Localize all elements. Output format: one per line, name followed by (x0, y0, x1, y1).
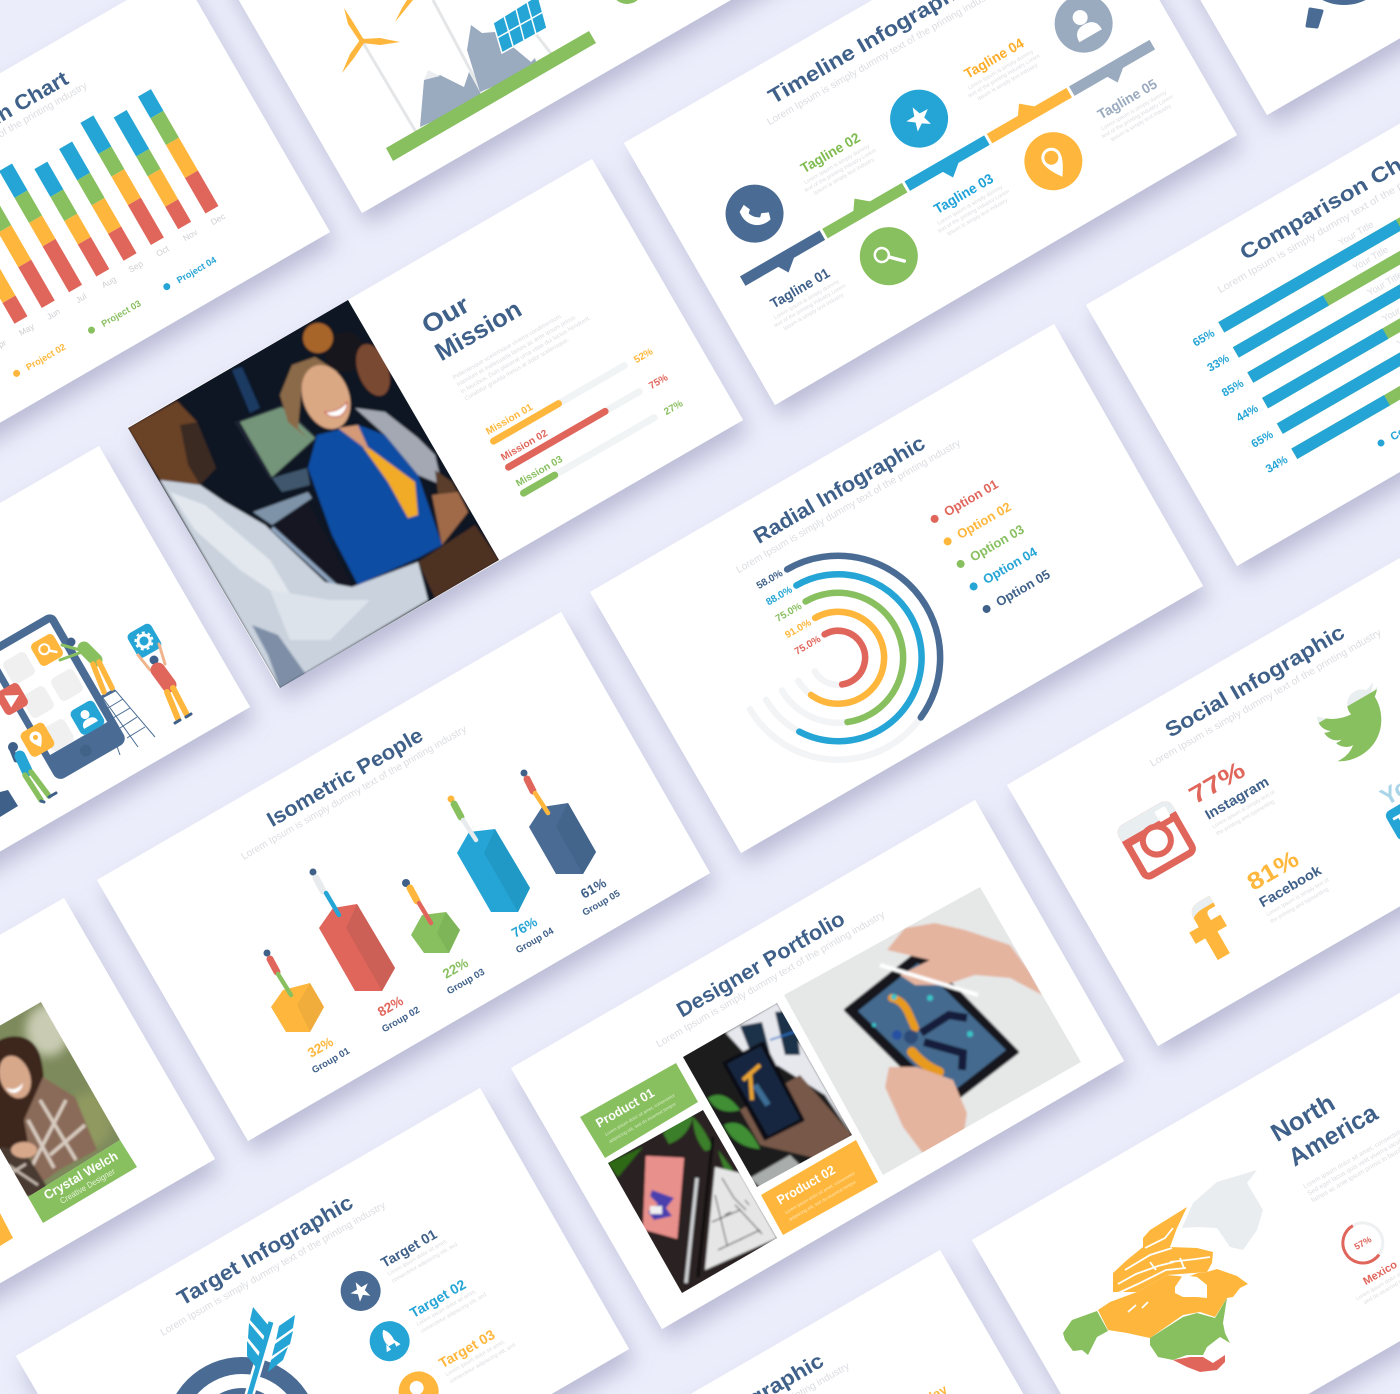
name band: Creative Designer (58, 1166, 117, 1206)
icon: instagram (1114, 798, 1199, 883)
percent labels: 65% (1250, 429, 1276, 451)
month axis labels: Sep (127, 258, 145, 275)
radial chart (699, 518, 977, 797)
stacked bars (0, 84, 218, 339)
month axis labels: Jul (74, 291, 88, 305)
navy base block (0, 790, 18, 817)
card: product 01: Product 01 (593, 1085, 657, 1131)
icon: app pin (19, 721, 56, 759)
solar panel (493, 0, 547, 53)
mission body text: in faucibus. Duis placerat urna vitae dui luctus hendrerit. (460, 315, 592, 395)
tagline blocks: text of the printing industry Lorem (773, 283, 847, 329)
social title: Social Infographic (1161, 621, 1349, 742)
tagline blocks: Ipsum is simply text industry (946, 198, 1009, 238)
mission body text: Pellentesque scelerisque viverra condimentum. (452, 313, 564, 381)
radial percent labels: 75.0% (774, 601, 804, 625)
icon: youtube (1371, 760, 1400, 842)
figure: group 03 person (402, 879, 431, 923)
tagline blocks: Ipsum is simply text industry (1110, 103, 1173, 143)
block: group 01 (271, 983, 324, 1032)
icon: star (879, 79, 959, 158)
radial legend: Option 04 (980, 544, 1040, 587)
radial legend: Option 05 (993, 566, 1053, 609)
percent labels: 85% (1220, 378, 1246, 400)
photo: crystal welch portrait (0, 1002, 120, 1197)
radial title: Radial Infographic (750, 431, 930, 549)
label: group 04 (505, 909, 556, 956)
label: group 03: Group 03 (445, 967, 487, 997)
label: group 02: Group 02 (380, 1005, 422, 1035)
month axis labels: Jun (45, 306, 62, 322)
target title: Target Infographic (173, 1191, 357, 1310)
donut: mexico 57%: 57% (1353, 1234, 1373, 1252)
mission title (415, 269, 527, 367)
stat: instagram: Instagram (1202, 773, 1271, 823)
tagline blocks: Lorem Ipsum is simply dummy (1100, 90, 1168, 132)
percent labels: 44% (1235, 403, 1261, 425)
radial legend: Option 02 (954, 499, 1014, 542)
stat: instagram: 77% (1185, 756, 1250, 810)
stat: instagram (1185, 749, 1281, 839)
radial percent labels: 91.0% (783, 617, 814, 641)
panel: crystal welch profile slide (0, 922, 214, 1283)
photo: business meeting (120, 290, 510, 700)
tagline blocks: Tagline 05 (1095, 75, 1160, 122)
map: greenland (1182, 1170, 1263, 1250)
label: group 05 (571, 871, 623, 919)
item: target 03: Target 03 (436, 1326, 498, 1371)
label: group 03: 22% (440, 955, 471, 982)
stat: facebook: 81% (1243, 846, 1304, 896)
block: group 04 (457, 829, 530, 912)
panel: radial infographic slide (590, 324, 1203, 853)
panel: north america slide (972, 972, 1400, 1394)
tagline blocks: Tagline 04 (961, 35, 1027, 82)
map: united states (1150, 1298, 1230, 1360)
tablet device (0, 611, 128, 782)
legend: Project 04 (175, 254, 219, 285)
app grid placeholders (1, 650, 85, 753)
north america title: North (1266, 1089, 1340, 1148)
panel: isometric people slide (97, 612, 710, 1141)
legend (1375, 400, 1400, 451)
card: product 01: adipiscing elit, sed do eiusmod tempor (608, 1101, 677, 1144)
item: target 02: consectetur adipiscing elit, sed (420, 1292, 488, 1335)
figure: group 05 person (520, 770, 548, 813)
label: group 04: 76% (509, 914, 540, 941)
month axis labels: Aug (100, 274, 118, 290)
progress bar: mission 01: Mission 01 (484, 402, 535, 438)
icon: facebook (1178, 896, 1239, 966)
tagline blocks: Lorem Ipsum is simply dummy (773, 279, 841, 321)
label: group 04: Group 04 (514, 925, 556, 956)
orange card fragment (0, 1213, 13, 1246)
progress bar: mission 01 (483, 336, 655, 449)
label: group 01: 32% (305, 1034, 336, 1061)
stat: facebook (1243, 837, 1335, 925)
tagline blocks: text of the printing industry Lorem (804, 148, 878, 194)
name band: Crystal Welch (41, 1148, 120, 1203)
icon: search (849, 217, 928, 296)
card: product 02: Lorem ipsum dolor sit amet, consectetur (784, 1170, 856, 1215)
panel: our mission slide (120, 159, 743, 700)
item: target 03: consectetur adipiscing elit, sed (449, 1342, 517, 1385)
panel: social infographic slide (1034, 628, 1400, 1046)
month axis labels (0, 211, 228, 353)
photo: tablet drawing (780, 880, 1090, 1180)
social subtitle: Lorem Ipsum is simply dummy text of the printing industry (1148, 627, 1383, 769)
target subtitle: Lorem Ipsum is simply dummy text of the printing industry (159, 1200, 388, 1339)
legend: Project 03 (100, 298, 143, 329)
radial legend (927, 476, 1053, 617)
stat: facebook: Lorem Ipsum is simply text of (1266, 877, 1331, 918)
percent labels: 65% (1191, 328, 1217, 349)
mission title: Mission (430, 295, 527, 367)
progress bar: mission 01: 52% (632, 346, 655, 366)
item: target 03 (391, 1320, 521, 1394)
item: target 01: consectetur adipiscing elit, sed (391, 1242, 459, 1284)
turbine blades (342, 0, 413, 73)
radial percent labels: 88.0% (764, 584, 795, 608)
item: target 02: Lorem ipsum dolor sit amet, (416, 1288, 478, 1328)
north america title (1266, 1072, 1383, 1174)
tagline blocks: Lorem Ipsum is simply dummy (937, 184, 1004, 227)
icon: twitter (1317, 682, 1382, 762)
portfolio subtitle: Lorem Ipsum is simply dummy text of the printing industry (655, 910, 887, 1050)
name band (28, 1140, 137, 1223)
tagline blocks: Lorem Ipsum is simply dummy (967, 49, 1035, 91)
item: target 02 (362, 1270, 492, 1369)
panel: magnifier slide (1116, 0, 1400, 115)
mission body text: Interdum et malesuada fames ac ante ipsum primis (456, 315, 577, 388)
label: group 05: Group 05 (581, 888, 623, 919)
item: target 01: Target 01 (378, 1226, 440, 1271)
ladder (100, 690, 155, 755)
figure: group 01 person (264, 950, 291, 995)
icon: app gear (126, 622, 163, 660)
radial subtitle: Lorem Ipsum is simply dummy text of the printing industry (735, 438, 963, 576)
progress bar: mission 02 (498, 362, 670, 475)
tagline blocks: text of the printing industry Lorem (937, 188, 1011, 235)
progress bar: mission 03 (513, 388, 685, 501)
map: alaska (1063, 1311, 1108, 1355)
tagline blocks: Lorem Ipsum is simply dummy (804, 143, 871, 186)
bar titles: Your Title (1351, 244, 1391, 274)
ground (386, 31, 596, 161)
green circle fragment (611, 0, 643, 4)
radial percent labels: 75.0% (793, 634, 823, 658)
progress bar: mission 02: Mission 02 (499, 428, 550, 464)
stat: instagram: the printing and typesetting (1215, 799, 1276, 837)
panel: designer portfolio slide (511, 800, 1124, 1329)
month axis labels: Oct (154, 243, 171, 259)
map: mexico (1173, 1355, 1225, 1372)
figure: group 02 person (310, 868, 339, 915)
progress bar: mission 02: 75% (647, 372, 670, 392)
label: mexico: Mexico (1361, 1259, 1400, 1288)
tagline blocks: Ipsum is simply text industry (977, 62, 1039, 102)
tagline blocks: text of the printing industry Lorem (968, 53, 1042, 99)
person: arms raised (138, 644, 191, 723)
donut: mexico 57% (1336, 1216, 1390, 1270)
figure: group 04 person (448, 796, 476, 840)
panel: renewable energy slide (211, 0, 826, 213)
block: group 05 (529, 803, 596, 874)
isometric title: Isometric People (263, 724, 427, 832)
panel: bottom centre slide (476, 1250, 1091, 1394)
month axis labels: May (17, 321, 37, 338)
icon: bullseye (165, 1357, 319, 1394)
tagline blocks: Tagline 03 (931, 170, 996, 217)
tagline blocks (709, 0, 1178, 335)
tagline blocks: Tagline 01 (767, 264, 833, 311)
label: group 03 (436, 950, 487, 997)
isometric subtitle: Lorem Ipsum is simply dummy text of the printing industry (240, 724, 469, 863)
icon: app search (29, 632, 65, 668)
snow caps (424, 70, 440, 80)
tagline blocks: Ipsum is simply text industry (813, 157, 876, 197)
mountain left (420, 72, 482, 127)
panel: mobile app illustration slide (0, 446, 250, 975)
person: blue holder (8, 742, 56, 802)
label: group 05: 61% (578, 875, 609, 902)
block: group 02 (319, 904, 395, 991)
mission body text: Curabitur gravida metus at dolor scelerisque. (464, 337, 571, 402)
icon: arrow (247, 1307, 295, 1394)
percent labels: 34% (1264, 454, 1290, 476)
block: group 03 (411, 912, 460, 953)
timeline bar segments (735, 31, 1160, 295)
label: group 01: Group 01 (310, 1045, 352, 1076)
radial legend: Option 01 (941, 476, 1001, 519)
stat: instagram: Lorem Ipsum is simply text of (1211, 789, 1277, 830)
label: mexico (1348, 1251, 1400, 1308)
icon: phone (715, 174, 794, 253)
mission title: Our (417, 290, 475, 340)
icon: app play (0, 681, 30, 717)
item: target 03: Lorem ipsum dolor sit amet, (445, 1339, 507, 1378)
radial percent labels: 58.0% (755, 568, 785, 592)
item: target 01 (333, 1219, 463, 1318)
tagline blocks: text of the printing industry Lorem (1101, 94, 1175, 140)
wind turbine poles (362, 0, 553, 132)
legend: Project 02 (24, 342, 67, 372)
label: group 02 (371, 988, 422, 1035)
tagline blocks: Ipsum is simply text industry (782, 292, 845, 332)
icon: person (1044, 0, 1123, 63)
card: product 02 (761, 1140, 878, 1235)
tagline blocks: Tagline 02 (798, 129, 863, 176)
card: product 01 (580, 1063, 698, 1158)
panel: target infographic slide (16, 1088, 629, 1394)
card: product 02: Product 02 (774, 1162, 838, 1208)
comparison bars (1218, 165, 1400, 459)
photo: phone and sketch (608, 1110, 777, 1293)
card: product 02: adipiscing elit, sed do eiusmod tempor (788, 1179, 857, 1222)
card: product 01: Lorem ipsum dolor sit amet, consectetur (604, 1092, 676, 1137)
panel: stacked column chart slide (0, 0, 330, 500)
item: target 01: Lorem ipsum dolor sit amet, (387, 1238, 449, 1278)
icon: magnifier (1307, 0, 1380, 27)
icon: app profile (69, 699, 106, 737)
mountain right (467, 25, 538, 92)
radial percent labels (755, 568, 823, 658)
month axis labels: Dec (209, 211, 228, 227)
item: target 02: Target 02 (407, 1276, 469, 1321)
person: green climber (60, 638, 112, 692)
panel: comparison chart slide (1086, 37, 1400, 566)
icon: pin (1014, 122, 1093, 201)
photo: hand holding phone (683, 1003, 852, 1187)
stat: facebook: Facebook (1256, 862, 1324, 910)
panel: timeline infographic slide (624, 0, 1237, 405)
percent labels: 33% (1206, 353, 1232, 375)
month axis labels: Nov (181, 227, 200, 243)
north america title: America (1284, 1098, 1383, 1172)
stat: facebook: the printing and typesetting (1270, 887, 1330, 925)
bar titles: Your Title (1337, 219, 1376, 248)
legend (11, 254, 219, 380)
radial legend: Option 03 (967, 521, 1027, 564)
label: group 01 (301, 1029, 352, 1076)
portfolio title: Designer Portfolio (673, 907, 849, 1022)
label: group 02: 82% (375, 993, 406, 1020)
percent labels (1191, 328, 1290, 476)
bar titles (1337, 219, 1400, 350)
progress bar: mission 03: 27% (662, 398, 685, 418)
progress bar: mission 03: Mission 03 (514, 454, 565, 490)
map: canada (1098, 1207, 1248, 1338)
